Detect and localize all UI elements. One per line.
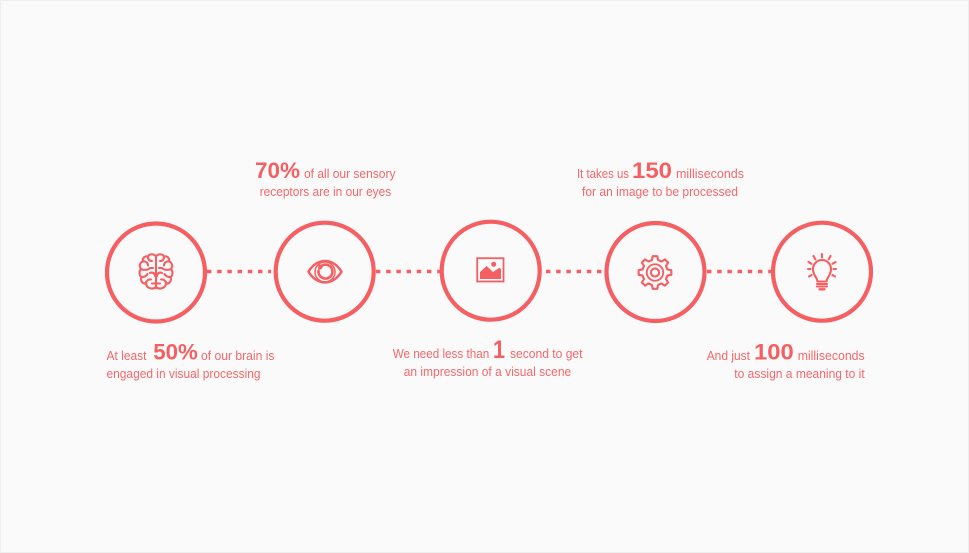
text: 50% of our brain: 50% bbox=[153, 340, 198, 364]
step 2: eye circle bbox=[276, 223, 374, 321]
text: 150 milliseconds: for an image to be processed bbox=[582, 185, 738, 199]
step 4: gear circle bbox=[606, 223, 704, 321]
text: 100 milliseconds: And just bbox=[707, 349, 750, 363]
connector: eye to image bbox=[376, 270, 440, 273]
icon: eye bbox=[308, 261, 342, 282]
text: less than 1 second: second to get bbox=[510, 347, 583, 361]
text: less than 1 second: an impression of a visual scene bbox=[404, 365, 571, 379]
connector: image to gear bbox=[546, 270, 604, 273]
text: 150 milliseconds: 150 bbox=[632, 158, 672, 183]
text: 50% of our brain: At least bbox=[106, 349, 147, 363]
text: 70% of sensory receptors: 70% bbox=[255, 158, 300, 183]
text: less than 1 second: 1 bbox=[493, 336, 505, 364]
step 5: bulb circle bbox=[773, 223, 871, 321]
text: 50% of our brain: of our brain is bbox=[201, 349, 274, 363]
text: 100 milliseconds: milliseconds bbox=[798, 349, 865, 363]
text: 100 milliseconds: 100 bbox=[754, 340, 794, 365]
step 3: image circle bbox=[442, 222, 540, 320]
text: 70% of sensory receptors: of all our sensory bbox=[304, 167, 396, 181]
text: 50% of our brain bbox=[106, 340, 274, 381]
icon: gear bbox=[639, 256, 671, 289]
text: 150 milliseconds: milliseconds bbox=[676, 167, 744, 181]
text: 100 milliseconds: to assign a meaning to it bbox=[734, 367, 865, 381]
text: 150 milliseconds bbox=[577, 158, 744, 199]
icon: light bulb bbox=[808, 254, 836, 289]
text: 50% of our brain: engaged in visual processing bbox=[106, 367, 261, 381]
icon: brain bbox=[140, 254, 172, 289]
text: 70% of sensory receptors bbox=[255, 158, 396, 199]
step 1: brain circle bbox=[107, 224, 205, 322]
connector: brain to eye bbox=[207, 270, 271, 273]
text: 70% of sensory receptors: receptors are in our eyes bbox=[260, 185, 391, 199]
connector: gear to bulb bbox=[707, 270, 771, 273]
text: less than 1 second: We need less than bbox=[393, 347, 489, 361]
icon: picture bbox=[477, 258, 504, 282]
text: 150 milliseconds: It takes us bbox=[577, 167, 629, 181]
text: 100 milliseconds bbox=[707, 340, 865, 381]
text: less than 1 second bbox=[393, 336, 583, 379]
